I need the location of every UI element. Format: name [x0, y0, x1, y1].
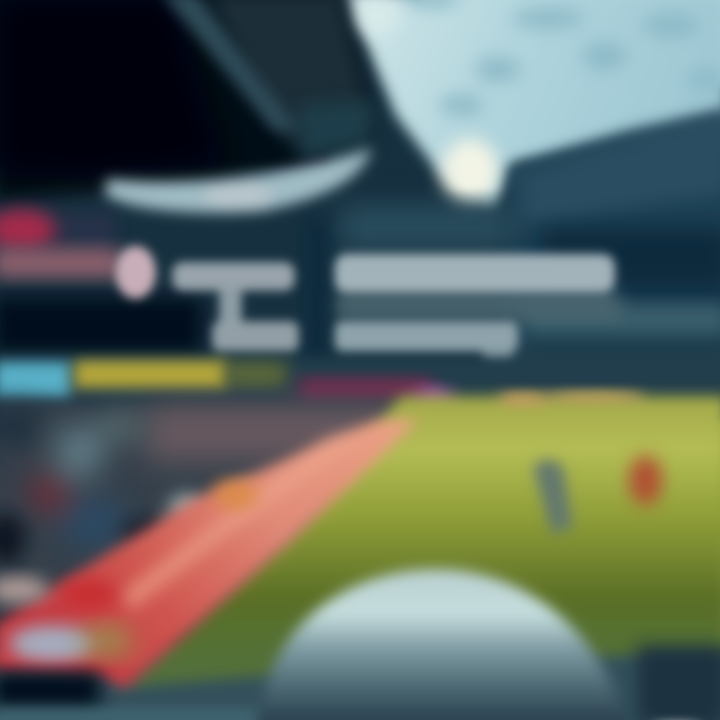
foreground bottom left objects — [0, 625, 258, 720]
banner strip — [0, 358, 720, 410]
crowd — [0, 401, 421, 605]
football pitch — [125, 391, 720, 686]
players on pitch — [533, 456, 662, 533]
central stands background — [0, 207, 620, 362]
foreground football — [260, 569, 627, 720]
stadium roof — [0, 0, 375, 202]
title: blurred, illegible lettering — [115, 246, 615, 360]
roof light band — [105, 148, 372, 213]
sky with clouds — [345, 0, 720, 209]
bottom right dark panel — [637, 646, 720, 720]
right grandstand — [503, 107, 720, 386]
red running track — [0, 419, 419, 688]
